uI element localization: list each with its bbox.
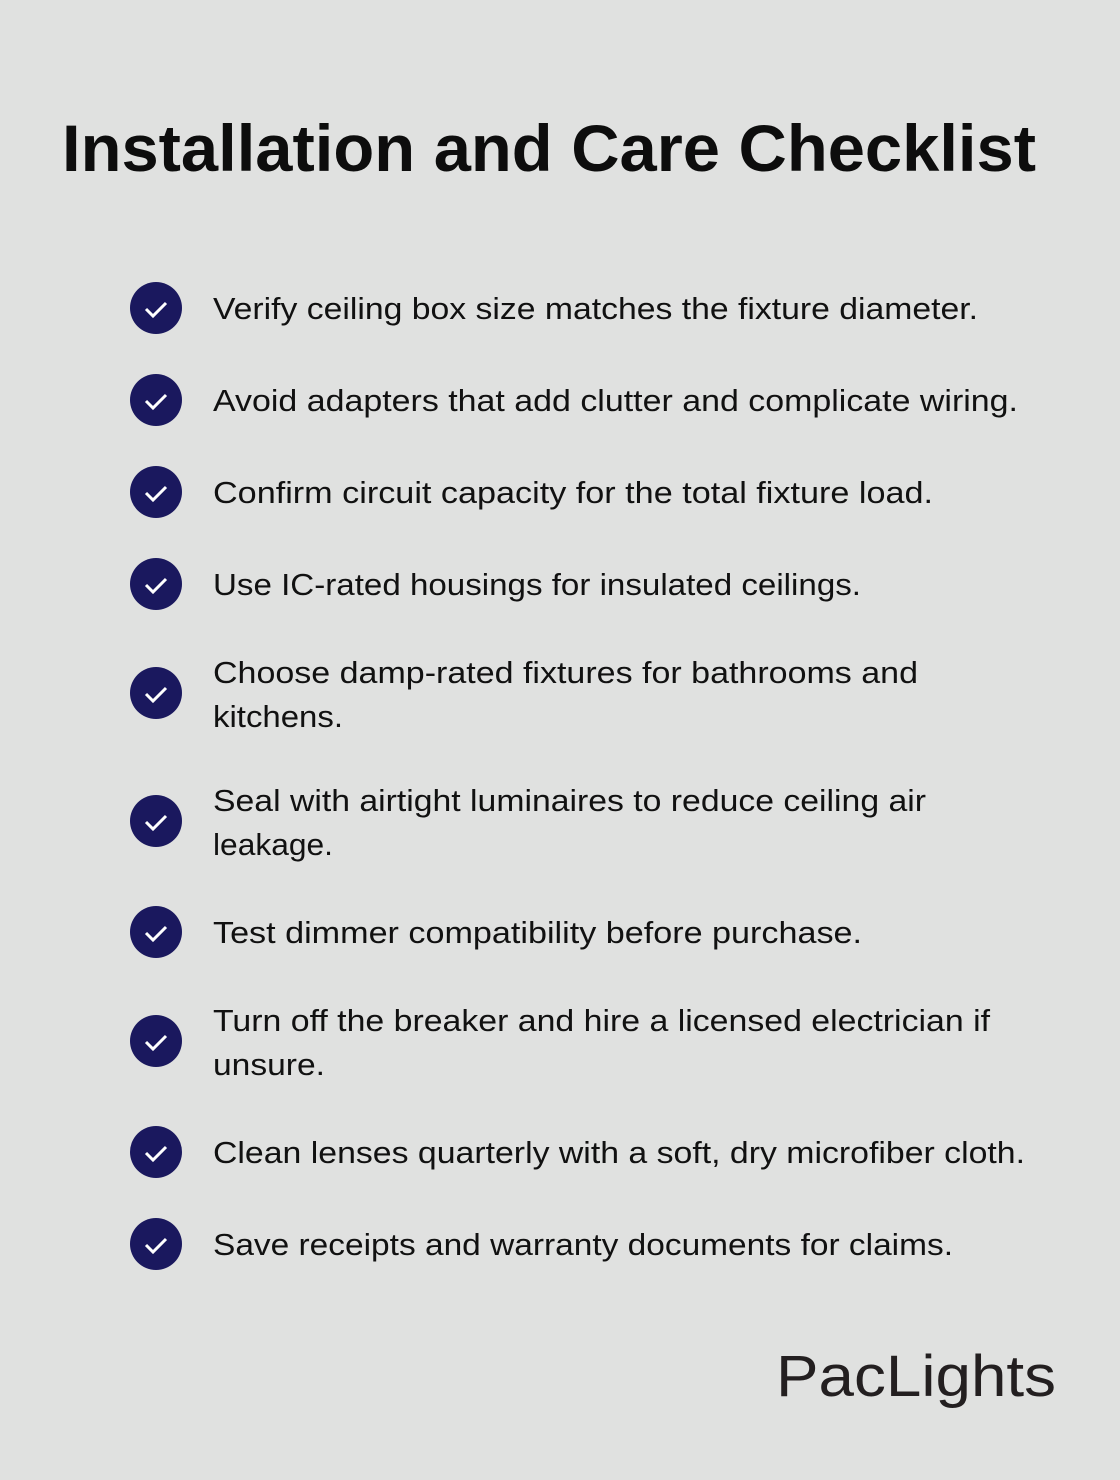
item 1 (130, 282, 978, 334)
item 5 (130, 655, 918, 734)
item 8: Turn off the breaker and hire a licensed electrician if (213, 1003, 990, 1038)
item 7 (130, 906, 862, 958)
logo: PacLights (776, 1344, 1056, 1409)
item 5: Choose damp-rated fixtures for bathrooms and (213, 655, 918, 690)
item 6: Seal with airtight luminaires to reduce ceiling air (213, 783, 926, 818)
item 2: Avoid adapters that add clutter and complicate wiring. (213, 383, 1018, 418)
item 9 (130, 1126, 1025, 1178)
item 9: Clean lenses quarterly with a soft, dry microfiber cloth. (213, 1135, 1025, 1170)
title: Installation and Care Checklist (62, 111, 1036, 185)
item 6: leakage. (213, 827, 333, 862)
item 2 (130, 374, 1018, 426)
item 3: Confirm circuit capacity for the total fixture load. (213, 475, 933, 510)
item 6 (130, 783, 926, 862)
item 4 (130, 558, 861, 610)
item 7: Test dimmer compatibility before purchase. (213, 915, 862, 950)
item 10 (130, 1218, 953, 1270)
item 8: unsure. (213, 1047, 325, 1082)
item 5: kitchens. (213, 699, 343, 734)
item 3 (130, 466, 933, 518)
item 8 (130, 1003, 990, 1082)
item 4: Use IC-rated housings for insulated ceilings. (213, 567, 861, 602)
item 1: Verify ceiling box size matches the fixture diameter. (213, 291, 978, 326)
checklist (130, 282, 1025, 1270)
item 10: Save receipts and warranty documents for claims. (213, 1227, 953, 1262)
